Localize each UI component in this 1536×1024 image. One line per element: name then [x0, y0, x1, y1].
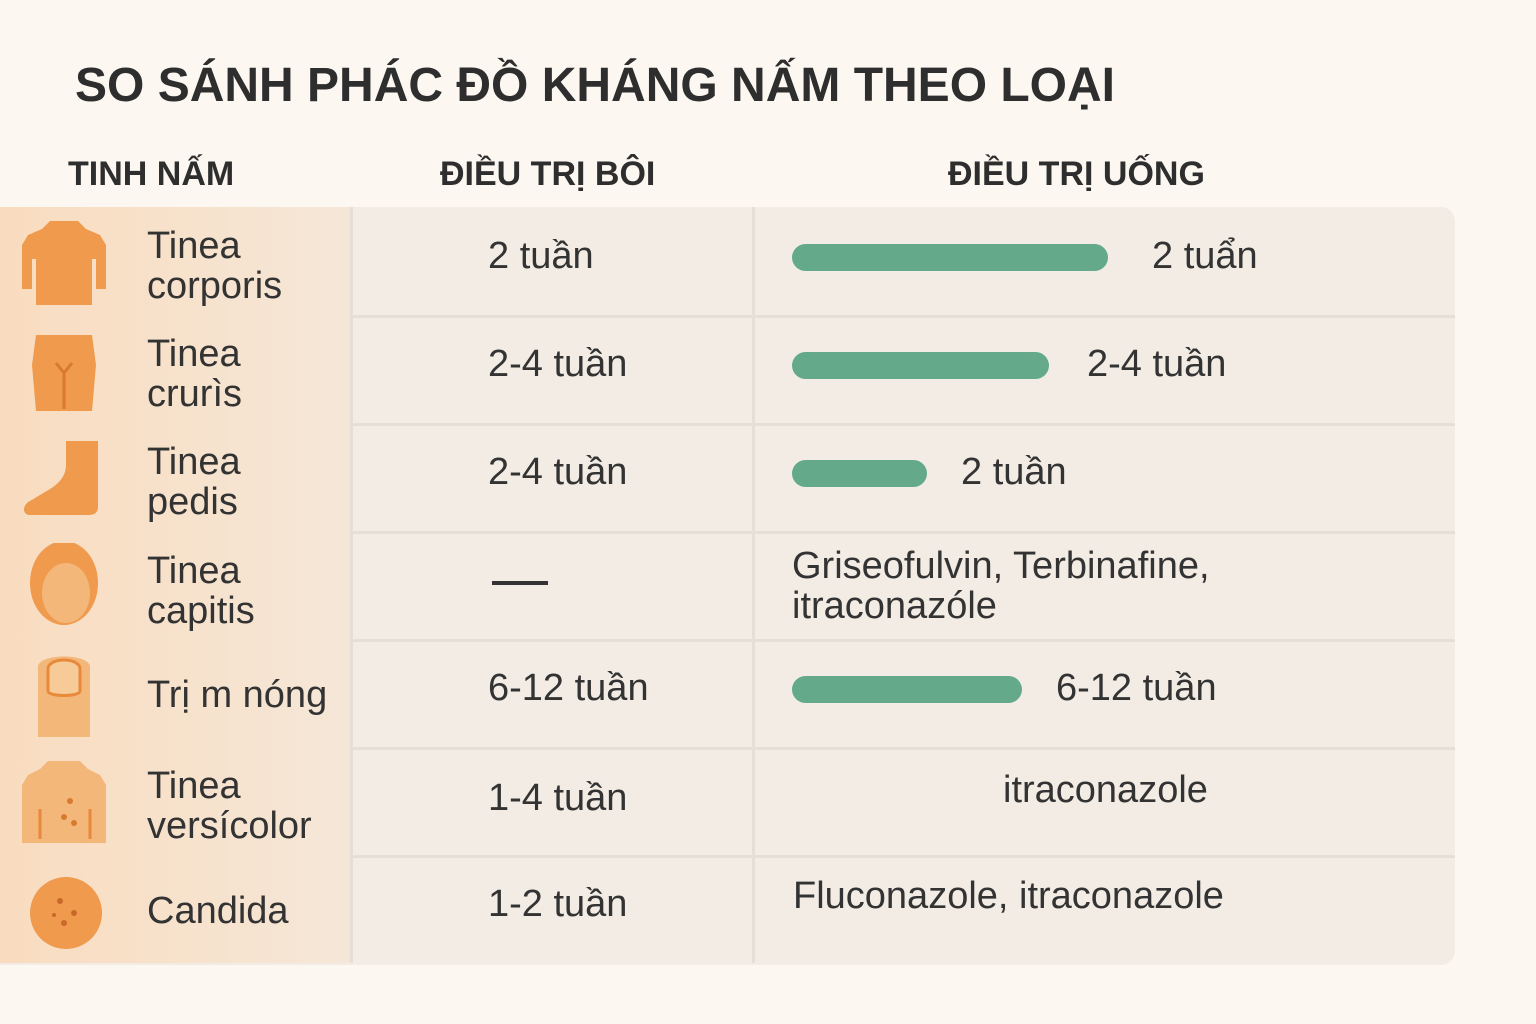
icon: groin — [32, 335, 96, 411]
table — [0, 207, 1455, 965]
icon: torso — [22, 221, 106, 305]
row: tinea versicolor: 1-4 tuần — [488, 777, 627, 819]
row: tinea cruris — [0, 315, 1455, 426]
row: tinea pedis: 2-4 tuần — [488, 451, 627, 493]
row: tinea capitis — [0, 531, 1455, 642]
icon: candida — [30, 877, 102, 949]
bar — [792, 460, 927, 487]
bar — [792, 676, 1022, 703]
icon: head — [30, 543, 98, 625]
row: tinea cruris: Tinea — [147, 333, 241, 375]
row: candida: Fluconazole, itraconazole — [793, 875, 1224, 917]
row: tinea pedis: Tinea — [147, 441, 241, 483]
row: tinea capitis: Griseofulvin, Terbinafine, — [792, 545, 1210, 587]
header: dieu tri boi: ĐIỀU TRỊ BÔI — [440, 155, 655, 193]
row: nail: 6-12 tuần — [1056, 667, 1217, 709]
row: tinea cruris: 2-4 tuần — [1087, 343, 1226, 385]
row: candida: Candida — [147, 890, 289, 932]
icon: foot — [24, 441, 98, 515]
bar — [792, 244, 1108, 271]
row: tinea pedis: pedis — [147, 481, 238, 523]
row: tinea pedis — [0, 423, 1455, 534]
row: tinea corporis: 2 tuẩn — [1152, 235, 1258, 277]
header: dieu tri uong: ĐIỀU TRỊ UỐNG — [948, 155, 1205, 193]
row: tinea capitis: Tinea — [147, 550, 241, 592]
icon: back — [22, 761, 106, 843]
row: tinea corporis: corporis — [147, 265, 282, 307]
row: candida: 1-2 tuần — [488, 883, 627, 925]
row: tinea corporis: 2 tuần — [488, 235, 594, 277]
row: candida — [0, 855, 1224, 963]
row: tinea capitis: itraconazóle — [792, 585, 997, 627]
row: nail: 6-12 tuần — [488, 667, 649, 709]
row: tinea versicolor: itraconazole — [1003, 769, 1208, 811]
row: tinea corporis — [0, 207, 1455, 318]
row: nail — [0, 639, 1455, 750]
header: tinh nam: TINH NẤM — [68, 155, 234, 193]
row: tinea corporis: Tinea — [147, 225, 241, 267]
row: tinea versicolor — [0, 747, 1455, 858]
row: tinea cruris: crurìs — [147, 373, 242, 415]
row: nail: Trị m nóng — [147, 674, 327, 716]
icon: nail — [38, 656, 90, 737]
title: SO SÁNH PHÁC ĐỒ KHÁNG NẤM THEO LOẠI — [75, 59, 1115, 112]
row: tinea cruris: 2-4 tuần — [488, 343, 627, 385]
row: tinea versicolor: versícolor — [147, 805, 312, 847]
row: tinea pedis: 2 tuần — [961, 451, 1067, 493]
row: tinea versicolor: Tinea — [147, 765, 241, 807]
row: tinea capitis: capitis — [147, 590, 255, 632]
bar — [792, 352, 1049, 379]
